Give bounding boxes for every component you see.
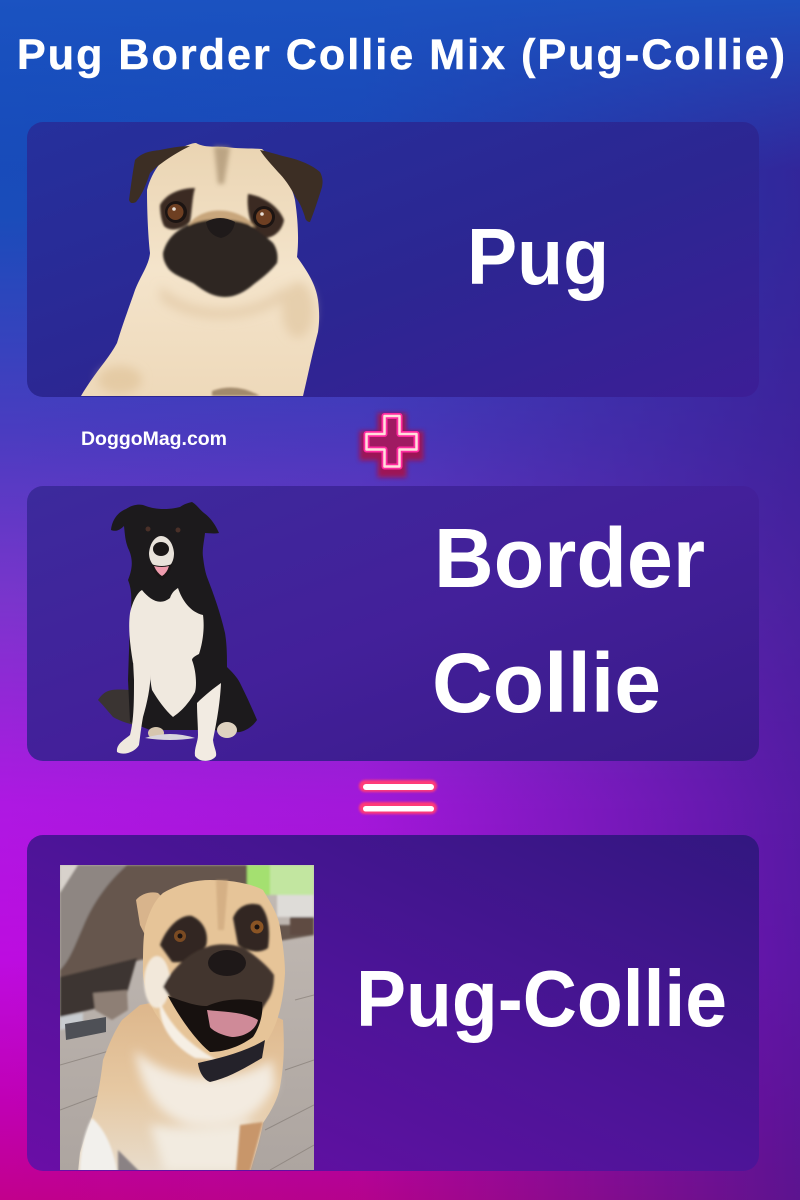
pug eyes — [165, 201, 275, 228]
panel: pug — [27, 122, 759, 397]
mix dog body — [78, 990, 284, 1172]
pug eye patches and muzzle — [160, 188, 284, 297]
photo: pug-collie — [60, 865, 314, 1172]
label: Pug: Pug — [467, 212, 609, 301]
mix dog collar — [198, 1040, 265, 1082]
panel: pug-collie — [27, 835, 759, 1172]
icon: neon equals sign — [359, 780, 437, 814]
collie white chest and legs — [129, 588, 204, 717]
photo: pug — [81, 143, 323, 396]
label: Border Collie — [432, 511, 705, 730]
speaker on the deck — [65, 1017, 106, 1040]
pug ears — [129, 146, 323, 222]
panel: border collie — [27, 486, 759, 761]
mix dog head — [136, 880, 285, 1060]
title: Pug Border Collie Mix (Pug-Collie) — [17, 31, 785, 79]
label: Border Collie: Collie — [432, 636, 661, 730]
label: Pug-Collie: Pug-Collie — [356, 954, 727, 1043]
mix dog eyes — [174, 920, 264, 942]
collie face — [146, 526, 180, 580]
mix dog nose and mouth — [168, 950, 262, 1052]
photo: border collie — [98, 502, 257, 761]
website credit: DoggoMag.com — [81, 429, 227, 450]
icon: neon plus sign — [366, 416, 416, 470]
label: Border Collie: Border — [434, 511, 705, 605]
